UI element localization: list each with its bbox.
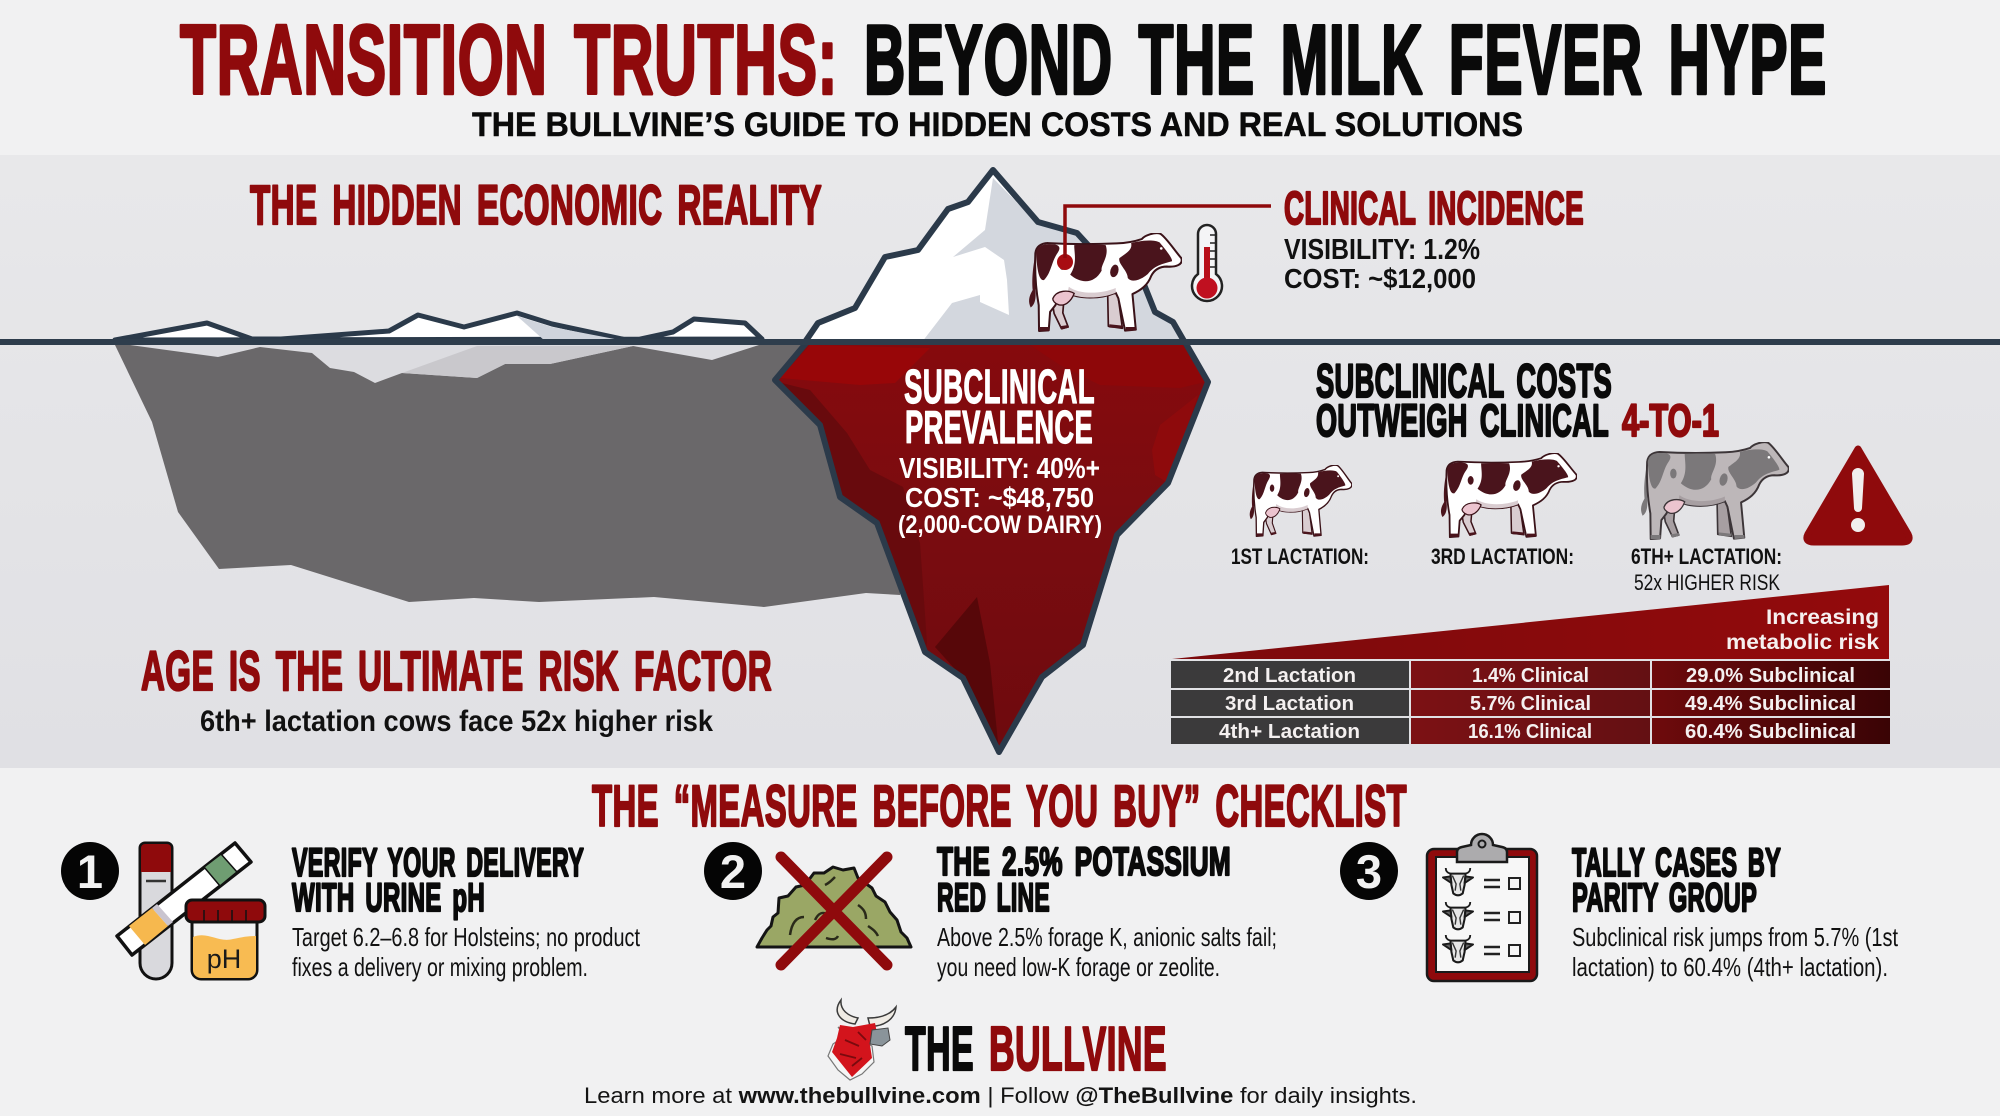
heading: age is the ultimate risk factor: AGE IS THE ULTIMATE RISK FACTOR xyxy=(141,639,772,702)
text: verify delivery: VERIFY YOUR DELIVERY xyxy=(292,841,584,885)
chart: increasing metabolic risk wedge: metabolic risk xyxy=(1726,631,1879,654)
row: 3rd lactation: 3rd Lactation xyxy=(1225,693,1354,715)
row: 4th+ lactation: 60.4% Subclinical xyxy=(1685,721,1856,743)
text: subclinical prevalence: (2,000-COW DAIRY) xyxy=(898,511,1102,539)
row: 2nd lactation: 2nd Lactation xyxy=(1223,665,1356,687)
text: subclinical prevalence: VISIBILITY: 40%+ xyxy=(899,453,1100,485)
panel: checklist background xyxy=(0,768,2000,1116)
text: 52x higher risk: 6th+ lactation cows face 52x higher risk xyxy=(200,705,713,738)
text: potassium red line: Above 2.5% forage K, anionic salts fail; xyxy=(937,922,1277,952)
illustration: red submerged iceberg xyxy=(775,342,1208,752)
checklist item 3 xyxy=(1340,834,1899,982)
text: subclinical prevalence xyxy=(898,361,1102,539)
heading: subclinical costs outweigh clinical: SUBCLINICAL COSTS xyxy=(1316,354,1612,407)
text: verify delivery: Target 6.2–6.8 for Holsteins; no product xyxy=(292,922,641,952)
heading: subclinical costs outweigh clinical: 4-TO-1 xyxy=(1622,395,1719,446)
row: 3rd lactation: 49.4% Subclinical xyxy=(1685,693,1856,715)
text: clinical incidence: CLINICAL INCIDENCE xyxy=(1284,182,1584,234)
text: tally cases: PARITY GROUP xyxy=(1572,876,1757,920)
text: tally cases xyxy=(1572,841,1899,982)
text: subclinical prevalence: COST: ~$48,750 xyxy=(905,482,1094,513)
text: subclinical prevalence: SUBCLINICAL xyxy=(904,361,1095,414)
row: 2nd lactation xyxy=(1171,661,1890,688)
table: lactation risk xyxy=(1171,661,1890,744)
labels: lactation cows: 52x HIGHER RISK xyxy=(1634,570,1780,595)
icon: test tube, strip and pH jar xyxy=(117,843,265,979)
text: clinical incidence: COST: ~$12,000 xyxy=(1284,263,1476,294)
footer logo: the bullvine: BULLVINE xyxy=(989,1015,1167,1084)
icon: clinical cow with callout line xyxy=(1029,206,1271,331)
text: potassium red line: THE 2.5% POTASSIUM xyxy=(937,840,1231,884)
icon: 3rd lactation cow xyxy=(1441,453,1577,537)
title: TRANSITION TRUTHS: xyxy=(180,4,838,114)
footer line: Learn more at www.thebullvine.com | Follow @TheBullvine for daily insights. xyxy=(584,1083,1417,1108)
text: tally cases: lactation) to 60.4% (4th+ lactation). xyxy=(1572,952,1888,982)
icon: 1st lactation cow xyxy=(1250,465,1352,536)
text: tally cases: TALLY CASES BY xyxy=(1572,841,1781,885)
chart: increasing metabolic risk wedge: Increasing xyxy=(1766,606,1879,629)
badge: number 3 xyxy=(1340,842,1398,900)
text: verify delivery xyxy=(292,841,641,982)
icon: test tube, strip and pH jar: pH xyxy=(207,944,241,974)
icon: 6th+ lactation gray cow xyxy=(1641,442,1789,539)
icon: bull head xyxy=(828,1000,896,1080)
heading: hidden economic reality: THE HIDDEN ECONOMIC REALITY xyxy=(250,173,822,236)
text: potassium red line xyxy=(937,840,1277,982)
labels: lactation cows: 1ST LACTATION: xyxy=(1231,544,1369,569)
footer logo: the bullvine xyxy=(828,1000,1167,1084)
text: potassium red line: RED LINE xyxy=(937,876,1050,920)
badge: number 3: 3 xyxy=(1356,845,1382,898)
subtitle: THE BULLVINE’S GUIDE TO HIDDEN COSTS AND REAL SOLUTIONS xyxy=(472,106,1523,144)
text: tally cases: Subclinical risk jumps from 5.7% (1st xyxy=(1572,922,1899,952)
row: 4th+ lactation: 16.1% Clinical xyxy=(1468,721,1592,743)
labels: lactation cows: 6TH+ LACTATION: xyxy=(1631,544,1782,569)
row: 4th+ lactation: 4th+ Lactation xyxy=(1219,721,1360,743)
illustration: main iceberg tip xyxy=(805,170,1188,348)
row: 3rd lactation xyxy=(1171,690,1890,716)
icon: crossed-out forage pile xyxy=(757,857,911,965)
badge: number 1 xyxy=(61,842,119,900)
row: 2nd lactation: 1.4% Clinical xyxy=(1472,665,1589,687)
row: 2nd lactation: 29.0% Subclinical xyxy=(1686,665,1855,687)
badge: number 2 xyxy=(704,842,762,900)
icon: clipboard tally xyxy=(1427,834,1537,981)
badge: number 1: 1 xyxy=(77,845,103,898)
heading: measure before you buy: THE “MEASURE BEFORE YOU BUY” CHECKLIST xyxy=(592,774,1407,839)
text: clinical incidence xyxy=(1284,182,1584,294)
row: 4th+ lactation xyxy=(1171,718,1890,744)
labels: lactation cows: 3RD LACTATION: xyxy=(1431,544,1574,569)
checklist item 2 xyxy=(704,840,1277,982)
illustration: wide gray submerged iceberg xyxy=(115,313,900,607)
text: verify delivery: WITH URINE pH xyxy=(292,876,485,920)
chart: increasing metabolic risk wedge xyxy=(1172,585,1889,659)
waterline xyxy=(0,339,2000,345)
text: clinical incidence: VISIBILITY: 1.2% xyxy=(1284,234,1480,266)
heading: subclinical costs outweigh clinical xyxy=(1316,354,1719,446)
icon: warning triangle xyxy=(1807,449,1909,542)
text: verify delivery: fixes a delivery or mixing problem. xyxy=(292,952,588,982)
title xyxy=(180,4,1827,114)
text: subclinical prevalence: PREVALENCE xyxy=(905,401,1093,453)
panel: iceberg band background xyxy=(0,155,2000,768)
footer logo: the bullvine: THE xyxy=(905,1015,974,1084)
labels: lactation cows xyxy=(1231,544,1782,595)
text: potassium red line: you need low-K forage or zeolite. xyxy=(937,952,1220,982)
checklist item 1 xyxy=(61,841,641,982)
heading: subclinical costs outweigh clinical: OUTWEIGH CLINICAL xyxy=(1316,395,1609,446)
badge: number 2: 2 xyxy=(720,845,746,898)
icon: thermometer xyxy=(1192,225,1222,301)
row: 3rd lactation: 5.7% Clinical xyxy=(1470,693,1591,715)
